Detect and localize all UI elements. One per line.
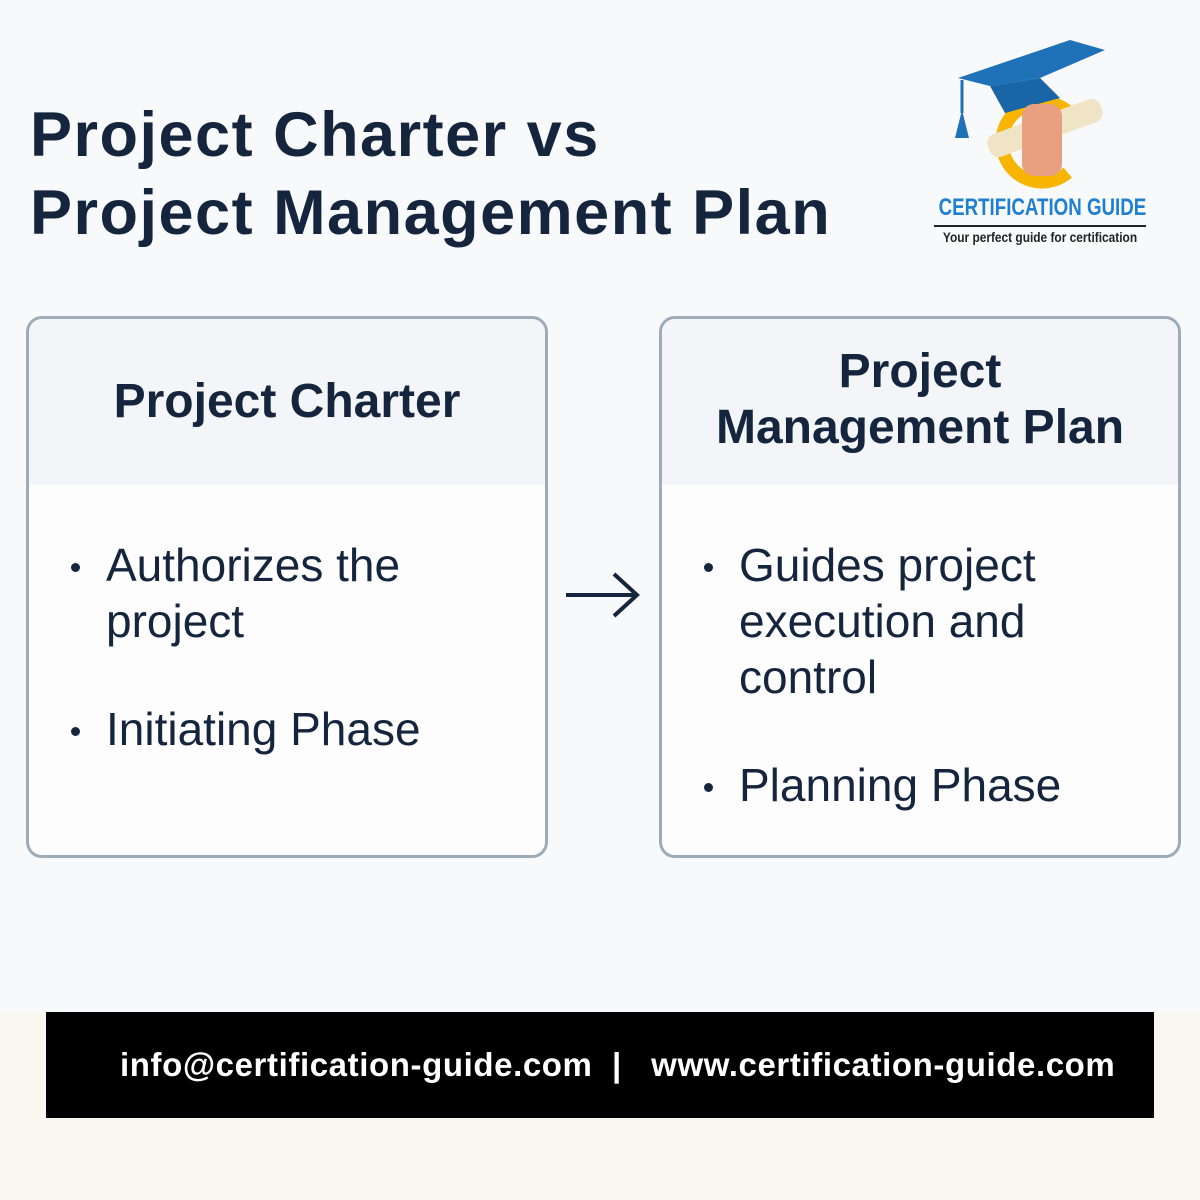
bullets: Guides project: [739, 539, 1036, 591]
panel: project charter: [26, 316, 548, 858]
arrow: [566, 572, 640, 618]
tagline: Your perfect guide for certification: [943, 229, 1137, 245]
title: Project Management Plan: [30, 178, 831, 248]
footer contact bar: [46, 1012, 1154, 1118]
bullets: Initiating Phase: [106, 703, 421, 755]
heading: [662, 319, 1178, 485]
logo text: CERTIFICATION GUIDE: [939, 194, 1146, 221]
heading: Management Plan: [716, 401, 1124, 454]
bullets: execution and: [739, 595, 1025, 647]
footer contact bar: info@certification-guide.com | www.certification-guide.com: [120, 1046, 1115, 1083]
title: Project Charter vs: [30, 100, 600, 170]
title: [30, 100, 831, 248]
bullets: control: [739, 651, 877, 703]
bullets: project: [106, 595, 244, 647]
heading: [29, 319, 545, 485]
heading: Project: [839, 345, 1001, 398]
heading: Project Charter: [114, 375, 460, 428]
bullets: [704, 539, 1061, 811]
logo: [934, 40, 1146, 245]
panel: project management plan: [659, 316, 1181, 858]
bullets: Planning Phase: [739, 759, 1061, 811]
bullets: Authorizes the: [106, 539, 400, 591]
footer background: [0, 1012, 1200, 1200]
icon: graduation cap and C: [955, 40, 1105, 188]
bullets: [71, 539, 421, 755]
